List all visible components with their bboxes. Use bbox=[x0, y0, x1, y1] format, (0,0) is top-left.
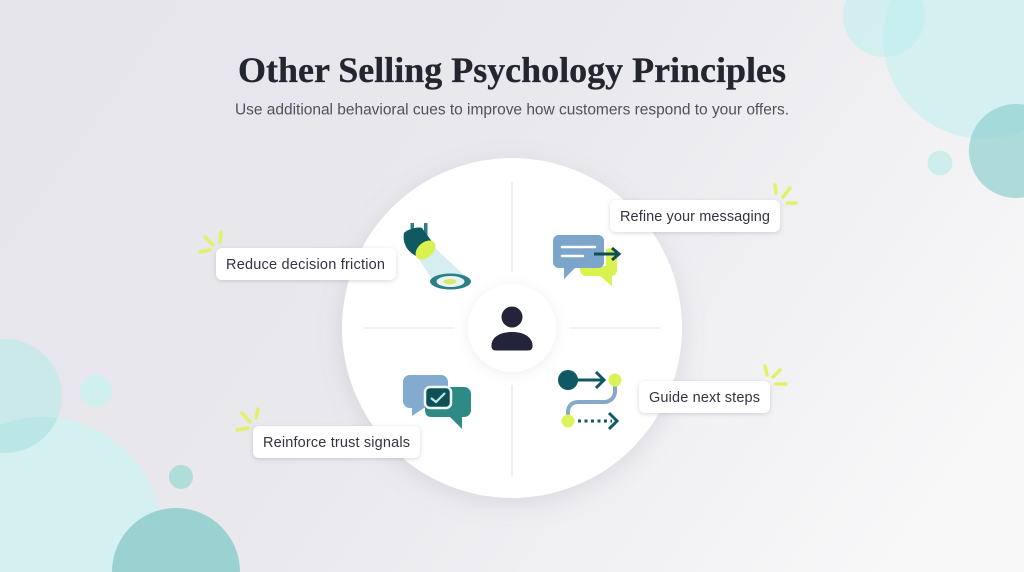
callout: refine your messaging bbox=[610, 185, 796, 232]
callout: reduce decision friction bbox=[200, 232, 396, 280]
callout: guide next steps bbox=[639, 366, 786, 413]
callout: reduce decision friction: Reduce decision friction bbox=[226, 257, 385, 273]
sparkle bbox=[237, 409, 258, 430]
callout: reinforce trust signals: Reinforce trust signals bbox=[263, 435, 410, 451]
sparkle bbox=[200, 232, 221, 252]
title: Other Selling Psychology Principles bbox=[238, 50, 786, 90]
decorative circles: bottom left bbox=[0, 339, 240, 572]
sparkle bbox=[765, 366, 786, 384]
callout: guide next steps: Guide next steps bbox=[649, 390, 760, 406]
subtitle: Use additional behavioral cues to improve how customers respond to your offers. bbox=[235, 102, 789, 118]
center person badge bbox=[468, 284, 556, 372]
callout: reinforce trust signals bbox=[237, 409, 420, 458]
icon: spotlight bbox=[404, 223, 471, 290]
sparkle bbox=[775, 185, 796, 203]
icon: chat with arrow bbox=[553, 235, 619, 286]
icon: steps path bbox=[558, 370, 622, 429]
decorative circles: top right bbox=[843, 0, 1024, 198]
icon: person bbox=[491, 306, 533, 350]
icon: chat with check bbox=[403, 375, 471, 429]
central white disk bbox=[342, 158, 682, 498]
callout: refine your messaging: Refine your messaging bbox=[620, 209, 770, 225]
